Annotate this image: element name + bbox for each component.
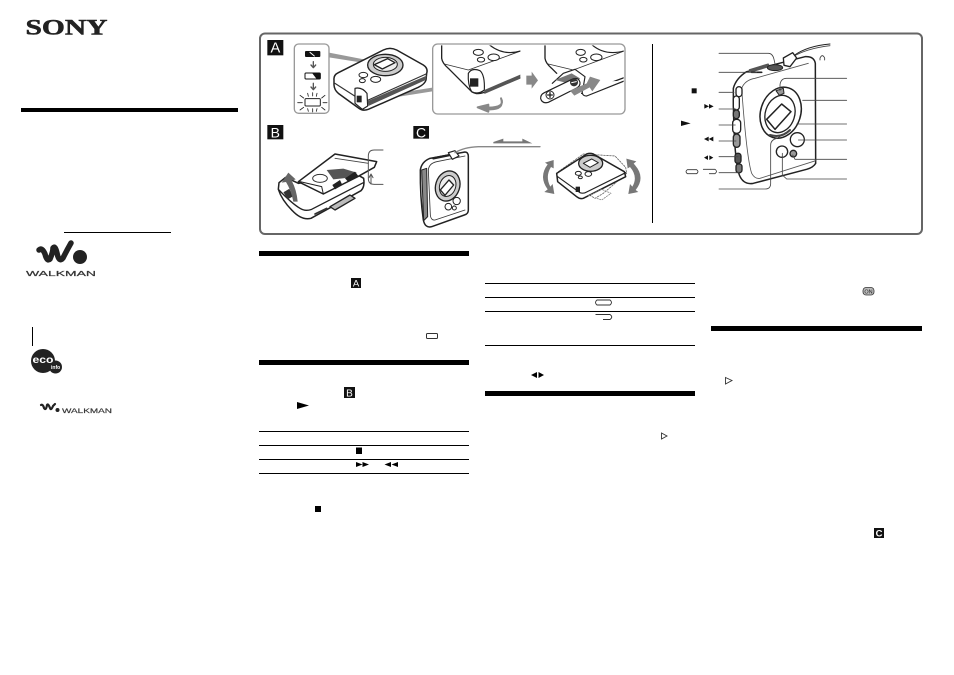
label C — [413, 124, 429, 140]
label A: A — [270, 41, 280, 57]
icon: outline play — [662, 433, 667, 439]
icon: stop — [692, 88, 697, 93]
arrow: rotate door — [478, 98, 502, 112]
detail step two — [541, 43, 625, 103]
cover heading rule — [21, 108, 238, 112]
inline label B — [344, 387, 355, 400]
front buttons — [776, 133, 804, 157]
battery cell — [541, 78, 580, 103]
icon: play — [297, 402, 309, 409]
detail step one — [442, 43, 522, 94]
table rules — [259, 431, 469, 474]
column three text icons — [711, 288, 922, 540]
inline label C — [874, 528, 884, 540]
battery detail panel — [433, 44, 625, 114]
icon: stop — [356, 448, 362, 454]
page canvas — [21, 20, 923, 538]
icon: rewind — [384, 462, 398, 467]
icon: on indicator — [863, 288, 874, 296]
icon: empty battery — [426, 334, 438, 338]
eco info badge: info — [51, 365, 60, 371]
arrows: rotate right — [626, 159, 641, 194]
table rules — [485, 283, 695, 346]
icon: stop note — [315, 506, 321, 512]
icon: fast forward — [356, 462, 369, 467]
icon: play — [681, 121, 691, 126]
small Walkman logo: WALKMAN — [62, 409, 112, 415]
short rule — [64, 232, 171, 233]
cassette — [298, 154, 377, 194]
inline label C: C — [876, 528, 883, 540]
section bar: playing — [259, 360, 469, 365]
callout wedges — [329, 53, 432, 102]
arrow down second — [311, 83, 316, 90]
arrows: rotate left — [543, 160, 554, 194]
icon: outline play — [726, 378, 732, 384]
SONY logo: SONY — [26, 14, 108, 40]
eco info badge — [31, 349, 62, 374]
inline label B: B — [346, 388, 353, 400]
icon: fast forward — [704, 104, 714, 109]
dial and display — [754, 82, 808, 144]
arrow: insert battery — [570, 77, 600, 96]
section bar: features — [485, 391, 695, 396]
player in figure B with cassette — [278, 154, 377, 219]
battery half — [305, 73, 320, 79]
inline label A — [351, 278, 361, 290]
leader lines — [719, 53, 847, 189]
arrow: next step — [526, 72, 538, 89]
label C: C — [416, 124, 426, 140]
battery empty flashing — [298, 93, 327, 112]
icon: repeat all — [596, 300, 612, 305]
eco info badge: eco — [32, 355, 54, 366]
figures A B C — [267, 40, 641, 227]
column one text icons — [259, 251, 469, 512]
icon: balance arrows — [531, 372, 544, 378]
Walkman W logo — [39, 243, 87, 264]
inline label A: A — [353, 278, 360, 290]
icon: balance arrows — [704, 155, 713, 160]
panel divider — [652, 44, 653, 223]
tilted player in figure C — [557, 153, 627, 200]
icon: repeat all — [686, 170, 698, 174]
section bar: batteries — [259, 251, 469, 256]
player in figure A — [334, 48, 427, 110]
bracket with arrow — [368, 150, 383, 184]
Walkman wordmark: WALKMAN — [26, 269, 96, 278]
parts diagram — [681, 44, 847, 189]
icon: on indicator: ON — [864, 290, 873, 296]
arrow down — [311, 62, 316, 68]
arrow: cord both ways — [493, 139, 532, 143]
icon: repeat one — [703, 169, 716, 174]
section bar: other — [711, 326, 922, 331]
headphone cord — [455, 147, 540, 153]
arrow: insert cassette — [282, 173, 298, 202]
left cover column — [21, 14, 238, 415]
column two text icons — [485, 283, 695, 439]
plug and cord — [783, 44, 830, 67]
side transport buttons — [733, 87, 742, 173]
player front view — [733, 57, 816, 184]
icon: repeat one — [596, 314, 612, 320]
change bar — [32, 327, 33, 346]
battery full — [305, 51, 320, 57]
control symbols — [681, 88, 714, 160]
label B: B — [271, 124, 280, 140]
label A — [267, 40, 283, 57]
icon: headphones — [820, 56, 825, 60]
icon: rewind — [704, 137, 713, 141]
illustration panel frame — [260, 34, 922, 234]
upright player in figure C — [420, 151, 468, 227]
label B — [267, 124, 283, 140]
small Walkman logo — [41, 404, 112, 415]
battery indicator panel — [294, 44, 329, 113]
